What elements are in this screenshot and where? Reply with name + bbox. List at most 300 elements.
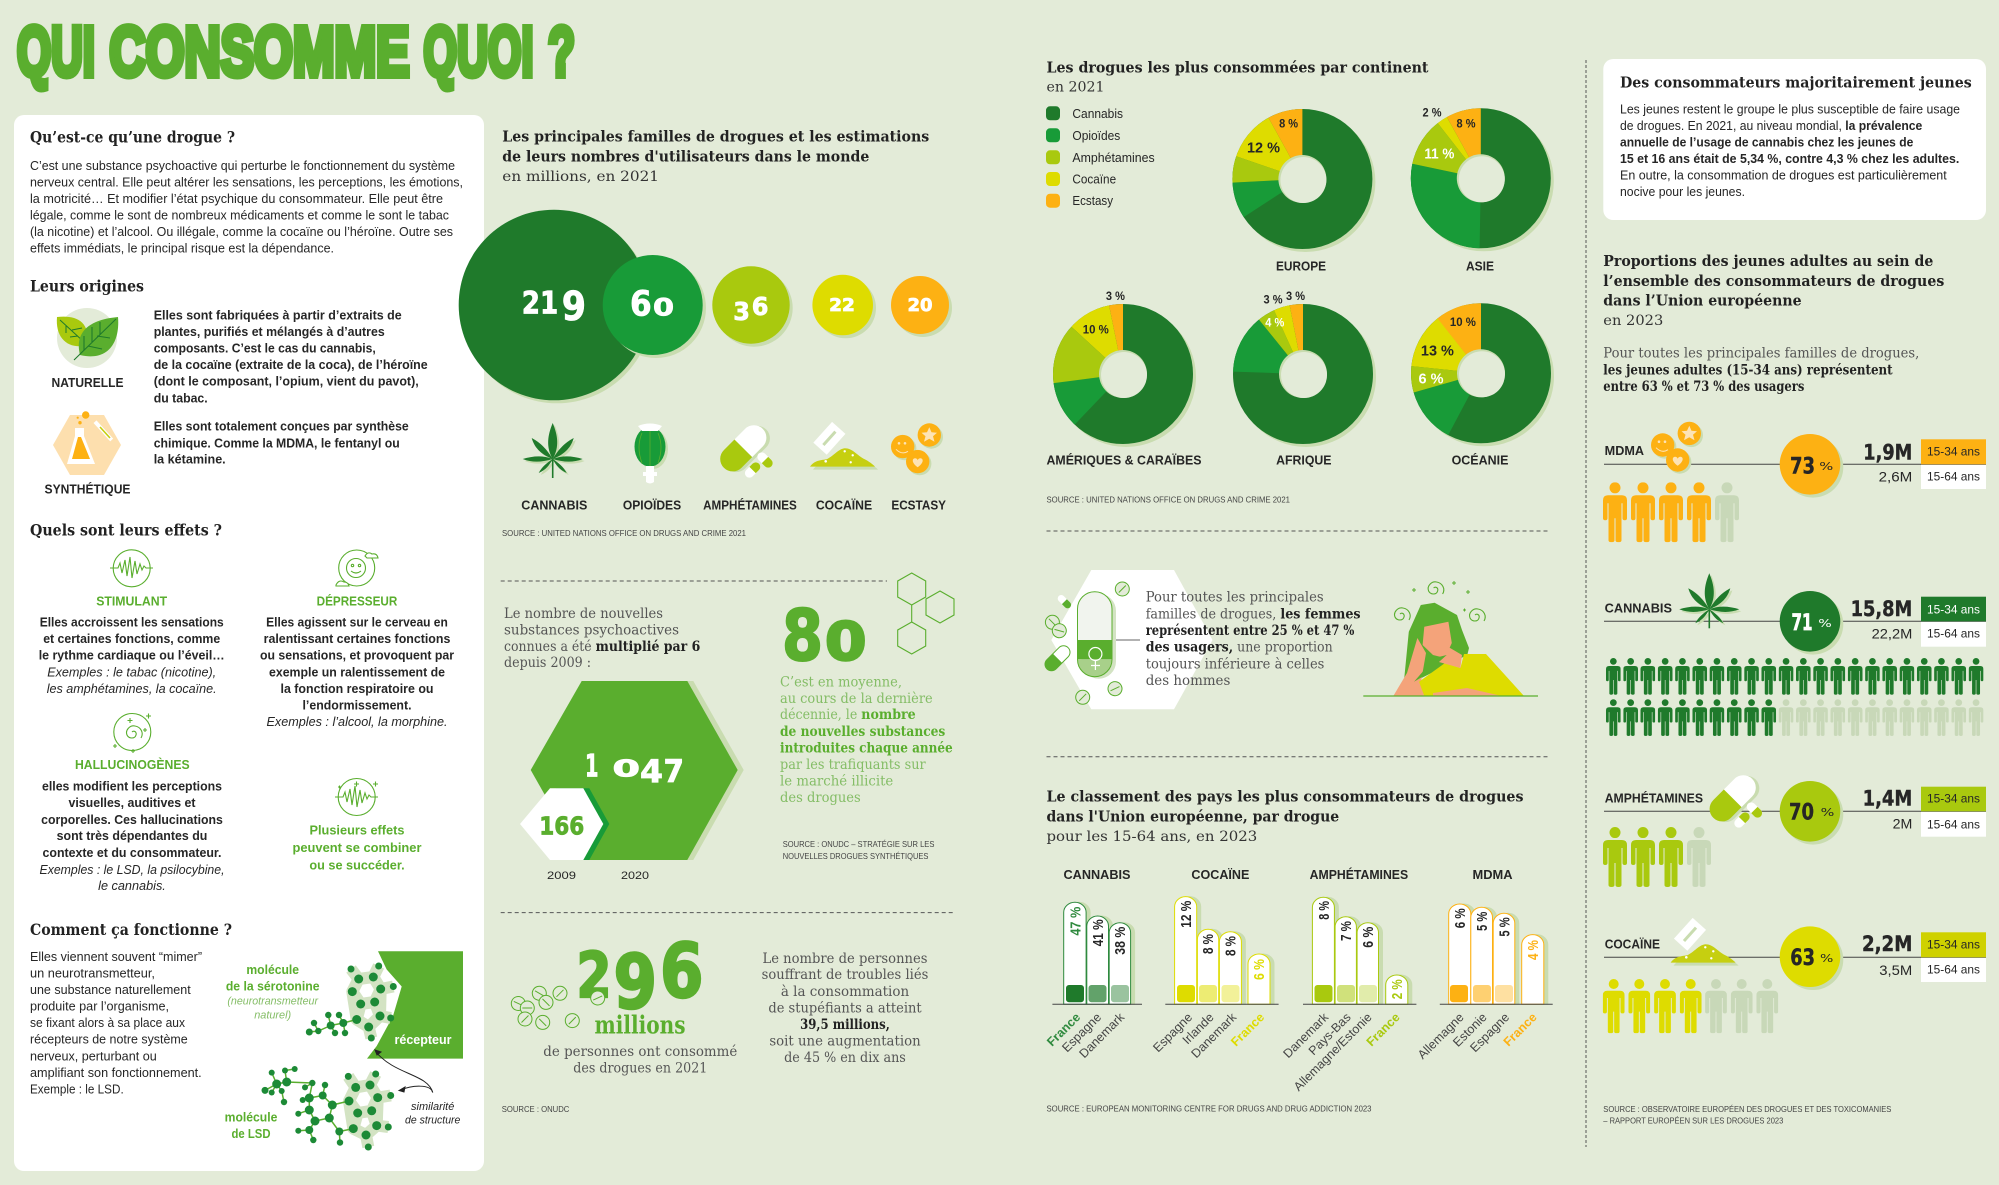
badge: 63 percent — [1780, 926, 1843, 990]
heading: young adult proportions — [1603, 252, 1944, 329]
badge: 63 percent: % — [1820, 952, 1833, 965]
text block: natural origin: (dont le composant, l’opium, vient du pavot), — [154, 374, 419, 389]
text block: drug disorders: de stupéfiants a atteint — [768, 1000, 922, 1016]
text block: how it works: une substance naturellement — [30, 982, 191, 997]
label: LSD molecule: de LSD — [232, 1126, 270, 1141]
big number: 296: 9 — [614, 938, 657, 1026]
heading: young adult proportions: dans l’Union européenne — [1603, 292, 1802, 310]
text block: women users: des hommes — [1146, 673, 1230, 689]
bar chart: amphetamines — [1280, 867, 1416, 1094]
bar chart: cocaine: Danemark — [1188, 1010, 1240, 1061]
bar chart: cocaine: COCAÏNE — [1191, 867, 1249, 882]
title: QUOI — [424, 12, 534, 90]
bubble chart: users — [459, 210, 952, 403]
row: MDMA — [1603, 422, 1986, 542]
badge: 71 percent — [1780, 591, 1843, 655]
label: Africa: AFRIQUE — [1276, 454, 1332, 468]
text block: young adult share: les jeunes adultes (15-34 ans) représentent — [1603, 362, 1893, 378]
text block: definition: C’est une substance psychoactive qui perturbe le fonctionnement du système — [30, 158, 455, 173]
legend: Ecstasy — [1072, 193, 1113, 208]
tags: age groups — [1921, 787, 1986, 837]
tags: age groups: 15-64 ans — [1927, 962, 1980, 976]
values: 1,4M of 2M — [1863, 787, 1912, 831]
source: European observatory — [1603, 1104, 1892, 1126]
text block: young users: Les jeunes restent le groupe le plus susceptible de faire usage — [1620, 101, 1960, 116]
donut: Oceania — [1414, 306, 1554, 468]
source: drug families: SOURCE : UNITED NATIONS OFFICE ON DRUGS AND CRIME 2021 — [502, 528, 746, 538]
heading: young adult proportions: en 2023 — [1603, 313, 1663, 329]
label: serotonin molecule — [226, 962, 320, 1021]
text block: drug disorders: 39,5 millions, — [800, 1017, 890, 1033]
bar chart: MDMA: 5 % — [1496, 917, 1514, 937]
donut: Africa: 3 % — [1286, 289, 1305, 303]
label: LSD molecule: molécule — [225, 1109, 277, 1124]
value: 166: 166 — [539, 811, 584, 840]
text block: young users: nocive pour les jeunes. — [1620, 184, 1745, 199]
text block: drug disorders: soit une augmentation — [769, 1034, 921, 1050]
donut: Africa — [1236, 289, 1376, 468]
icon: scattered tablets — [509, 985, 607, 1029]
text block: combined effects: Plusieurs effets — [310, 823, 404, 838]
label: structural similarity — [405, 1101, 460, 1126]
text block: hallucinogens: elles modifient les perceptions — [42, 779, 222, 794]
text block: young adult share: Pour toutes les principales familles de drogues, — [1603, 346, 1919, 362]
bar chart: MDMA: Estonie — [1450, 1010, 1490, 1050]
text block: yearly new substances: décennie, le nombre — [780, 707, 916, 723]
text block: how it works: récepteurs de notre système — [30, 1032, 188, 1047]
label: serotonin molecule: naturel) — [254, 1009, 292, 1021]
bar chart: cocaine: Irlande — [1180, 1010, 1217, 1047]
tags: age groups: 15-34 ans — [1927, 937, 1980, 951]
value: 1 047: 1 — [585, 748, 598, 784]
pictogram: people amphetamines — [1603, 827, 1711, 887]
text block: depressant — [260, 614, 454, 729]
value: 1 047 — [585, 748, 684, 790]
heading: drugs by continent: en 2021 — [1046, 80, 1104, 96]
text block: natural origin: de la cocaïne (extraite de la coca), de l’héroïne — [154, 357, 428, 372]
badge: 73 percent: % — [1819, 460, 1833, 473]
badge: 70 percent: % — [1821, 806, 1834, 819]
heading: young users: Des consommateurs majoritairement jeunes — [1620, 73, 1972, 91]
values: 2,2M of 3,5M: 3,5M — [1879, 962, 1912, 978]
molecule: serotonin — [306, 962, 397, 1042]
legend: Opioïdes — [1072, 128, 1121, 143]
bar chart: cocaine — [1150, 867, 1279, 1061]
text block: new substances: Le nombre de nouvelles — [504, 606, 663, 622]
bar chart: amphetamines: Allemagne/Estonie — [1291, 1010, 1375, 1094]
bubble: cannabis 219: 21 — [522, 285, 558, 321]
text block: definition: effets immédiats, le principal risque est la dépendance. — [30, 241, 334, 256]
text block: stimulant: Exemples : le tabac (nicotine), — [47, 664, 216, 680]
bubble: ecstasy 20 — [891, 276, 952, 337]
legend: Amphétamines — [1072, 150, 1155, 165]
text block: young users: 15 et 16 ans était de 5,34 %, contre 4,3 % chez les adultes. — [1620, 151, 1959, 166]
donut: Americas and Caribbean — [1046, 289, 1202, 468]
source: ONUDC: SOURCE : ONUDC — [502, 1104, 569, 1114]
text block: young users: annuelle de l’usage de cannabis chez les jeunes de — [1620, 135, 1913, 150]
text block: depressant: la fonction respiratoire ou — [280, 681, 434, 696]
bar chart: MDMA: 5 % — [1474, 912, 1491, 931]
text block: drug disorders: souffrant de troubles liés — [762, 967, 928, 983]
label: LSD molecule — [225, 1109, 277, 1141]
text block: stimulant — [39, 614, 225, 696]
text block: stimulant: le rythme cardiaque ou l’éveil… — [39, 648, 225, 662]
text block: combined effects: ou se succéder. — [309, 858, 405, 872]
text block: natural origin: Elles sont fabriquées à partir d’extraits de — [154, 307, 402, 322]
text block: how it works: se fixant alors à sa place aux — [30, 1015, 185, 1030]
arrows: structural similarity — [375, 1050, 433, 1092]
text block: drug disorders: de 45 % en dix ans — [784, 1050, 906, 1066]
bar chart: MDMA: France — [1501, 1010, 1540, 1049]
donut: Asia — [1414, 106, 1554, 273]
tags: age groups: 15-64 ans — [1927, 470, 1980, 484]
bar chart: cannabis: 41 % — [1090, 919, 1107, 946]
bar chart: amphetamines: 2 % — [1389, 979, 1406, 999]
text block: hallucinogens: Exemples : le LSD, la psilocybine, — [40, 862, 224, 877]
labels: drug families: ECSTASY — [891, 498, 947, 512]
bar chart: cannabis: France — [1044, 1010, 1083, 1049]
big number: 80: 8 — [782, 595, 823, 677]
text block: natural origin: plantes, purifiés et mélangés à d’autres — [154, 324, 385, 339]
donut: Europe: 8 % — [1279, 117, 1298, 131]
bar chart: cocaine: 8 % — [1200, 934, 1217, 954]
icon: ecstasy — [891, 423, 943, 475]
text block: yearly new substances: de nouvelles substances — [780, 724, 946, 740]
values: 15,8M of 22,2M: 15,8M — [1851, 597, 1912, 621]
values: 2,2M of 3,5M — [1862, 932, 1912, 978]
values: 1,4M of 2M: 1,4M — [1863, 787, 1912, 811]
values: 2,2M of 3,5M: 2,2M — [1862, 932, 1912, 956]
heading: what is a drug: Qu’est-ce qu’une drogue ? — [30, 128, 235, 147]
value: 1 047: 4 — [640, 754, 663, 790]
heading: drug families: de leurs nombres d'utilisateurs dans le monde — [502, 148, 869, 166]
text block: young adult share — [1603, 346, 1919, 395]
pictogram: people cocaine — [1603, 979, 1778, 1033]
heading: EU country ranking: Le classement des pays les plus consommateurs de drogues — [1046, 788, 1524, 806]
icon: synthetic flask — [53, 411, 121, 475]
label: Oceania: OCÉANIE — [1452, 453, 1508, 468]
text block: synthetic origin — [154, 419, 409, 467]
badge: 73 percent: 73 — [1790, 454, 1815, 479]
text block: stimulant: les amphétamines, la cocaïne. — [47, 681, 217, 696]
heading: drugs by continent — [1046, 58, 1429, 96]
source: new substances: SOURCE : ONUDC – STRATÉGIE SUR LES — [783, 839, 935, 849]
bubble: cannabis 219: 9 — [562, 284, 586, 330]
bubble: amphetamines 36 — [712, 266, 793, 347]
heading: young adult proportions: Proportions des jeunes adultes au sein de — [1603, 252, 1933, 270]
text block: natural origin — [154, 307, 428, 405]
row: cannabis — [1604, 573, 1986, 736]
text block: women users: Pour toutes les principales — [1146, 590, 1324, 606]
source: country ranking: SOURCE : EUROPEAN MONITORING CENTRE FOR DRUGS AND DRUG ADDICTION 2023 — [1046, 1104, 1372, 1114]
text block: how it works: produite par l’organisme, — [30, 999, 169, 1014]
text block: definition: légale, comme le sont de nombreux médicaments et comme le sont le tabac — [30, 208, 449, 223]
heading: drug families: Les principales familles de drogues et les estimations — [502, 128, 929, 146]
text block: new substances: depuis 2009 : — [504, 655, 591, 671]
bar chart: amphetamines: Pays-Bas — [1306, 1010, 1354, 1058]
bar chart: cannabis — [1044, 868, 1142, 1061]
bar chart: cannabis: 38 % — [1112, 927, 1129, 955]
bar chart: cocaine: 8 % — [1222, 936, 1240, 956]
text block: stimulant: Elles accroissent les sensations — [40, 614, 224, 629]
heading: drugs by continent: Les drogues les plus consommées par continent — [1046, 58, 1429, 76]
row: cocaine — [1603, 918, 1986, 1033]
bubble: cocaine 22: 22 — [829, 295, 855, 316]
bar chart: cannabis: Danemark — [1076, 1010, 1128, 1061]
text block: new substances — [504, 606, 700, 671]
pictogram: people MDMA — [1603, 482, 1739, 542]
illustration: dizzy woman — [1363, 581, 1538, 696]
bubble: cocaine 22 — [812, 275, 876, 338]
text block: young users — [1620, 101, 1960, 199]
badge: 70 percent: 70 — [1789, 800, 1814, 825]
text block: depressant: Elles agissent sur le cerveau en — [266, 614, 448, 629]
heading: EU country ranking: pour les 15-64 ans, en 2023 — [1046, 829, 1257, 845]
text block: new substances: connues a été multiplié par 6 — [504, 639, 700, 655]
text block: hallucinogens: contexte et du consommateur. — [42, 845, 222, 860]
text block: depressant: ou sensations, et provoquent par — [260, 648, 454, 662]
icon: amphetamine pill — [1704, 769, 1765, 830]
values: 1,9M of 2,6M: 1,9M — [1863, 440, 1912, 464]
text block: hallucinogens: sont très dépendantes du — [57, 828, 207, 843]
donut: Oceania: 13 % — [1421, 343, 1454, 360]
badge: 71 percent: 71 — [1792, 611, 1812, 636]
text block: yearly new substances: des drogues — [780, 790, 861, 806]
row: amphetamines — [1603, 769, 1986, 887]
bar chart: amphetamines: AMPHÉTAMINES — [1310, 867, 1408, 882]
bar chart: amphetamines: 7 % — [1338, 921, 1355, 941]
heading: EU country ranking: dans l'Union européenne, par drogue — [1046, 808, 1339, 826]
bar chart: cannabis: 47 % — [1068, 907, 1084, 936]
tags: age groups — [1921, 439, 1986, 489]
bubble: opioids 60 — [603, 255, 706, 358]
text block: natural origin: composants. C’est le cas du cannabis, — [154, 340, 376, 355]
text block: yearly new substances: le marché illicite — [780, 774, 893, 790]
bubble: opioids 60: 0 — [653, 294, 674, 322]
text block: yearly new substances: introduites chaque année — [780, 741, 953, 757]
values: 1,4M of 2M: 2M — [1893, 815, 1912, 831]
values: 1,9M of 2,6M — [1863, 440, 1912, 485]
bar chart: cocaine: 12 % — [1178, 901, 1195, 928]
source: new substances: NOUVELLES DROGUES SYNTHÉTIQUES — [783, 851, 929, 861]
text block: definition: (la nicotine) et l’alcool. Ou illégale, comme la cocaïne ou l’héroïne. Outre ses — [30, 224, 453, 239]
text block: women users — [1146, 590, 1361, 689]
donut: Asia: 8 % — [1456, 117, 1476, 131]
text block: young users: En outre, la consommation de drogues est particulièrement — [1620, 168, 1947, 183]
source: new substances — [783, 839, 935, 861]
text block: drug disorders — [762, 951, 928, 1066]
text block: yearly new substances: C’est en moyenne, — [780, 674, 902, 690]
text block: how it works: un neurotransmetteur, — [30, 966, 155, 981]
axis label: 2009: 2009 — [547, 870, 576, 882]
heading: drug families — [502, 128, 929, 185]
bar chart: MDMA: 4 % — [1525, 940, 1542, 960]
legend: Cannabis — [1072, 106, 1123, 121]
title: CONSOMME — [110, 12, 410, 90]
donut: Africa: 3 % — [1264, 292, 1283, 306]
legend — [1046, 106, 1155, 208]
values: 1,9M of 2,6M: 2,6M — [1879, 469, 1912, 485]
pictogram: people cannabis — [1606, 658, 1983, 736]
icon: natural leaves — [57, 308, 118, 368]
text block: yearly new substances: au cours de la dernière — [780, 691, 933, 707]
label: stimulant: STIMULANT — [96, 595, 168, 609]
labels: drug families: COCAÏNE — [816, 497, 872, 512]
text block: women users: des usagers, une proportion — [1146, 640, 1333, 656]
donut: Asia: 11 % — [1424, 146, 1454, 163]
label: amphetamines: AMPHÉTAMINES — [1605, 790, 1703, 805]
bar chart: cannabis: CANNABIS — [1064, 868, 1130, 882]
text block: women users: représentent entre 25 % et 47 % — [1146, 623, 1355, 639]
tags: age groups: 15-34 ans — [1927, 602, 1980, 616]
label: structural similarity: de structure — [405, 1114, 460, 1126]
bubble: ecstasy 20: 20 — [908, 295, 932, 316]
icon: stimulant — [110, 550, 153, 587]
bar chart: MDMA: MDMA — [1472, 868, 1512, 882]
big number: 296: 6 — [660, 927, 704, 1015]
label: cannabis: CANNABIS — [1605, 601, 1672, 615]
donut: Oceania: 6 % — [1418, 370, 1444, 387]
receptor shape — [367, 951, 463, 1059]
text block: 296 million users — [543, 1044, 737, 1076]
bar chart: amphetamines: Danemark — [1280, 1010, 1332, 1061]
badge: 73 percent — [1780, 434, 1843, 498]
labels: drug families: AMPHÉTAMINES — [703, 497, 797, 512]
heading: effects: Quels sont leurs effets ? — [30, 521, 222, 540]
donut: Asia: 2 % — [1422, 106, 1442, 120]
text block: how it works: amplifiant son fonctionnement. — [30, 1065, 202, 1080]
donut: Americas and Caribbean: 3 % — [1106, 289, 1125, 303]
bar chart: amphetamines: 6 % — [1360, 927, 1377, 948]
title: QUI — [17, 12, 95, 90]
text block: depressant: exemple un ralentissement de — [269, 664, 445, 680]
big number: 80: 0 — [825, 612, 866, 673]
badge: 71 percent: % — [1818, 617, 1832, 630]
text block: yearly new substances — [780, 674, 953, 806]
bar chart: amphetamines: 8 % — [1316, 901, 1333, 920]
tags: age groups: 15-64 ans — [1927, 817, 1980, 831]
heading: origins: Leurs origines — [30, 277, 144, 296]
text block: yearly new substances: par les trafiquants sur — [780, 757, 926, 773]
text block: young adult share: entre 63 % et 73 % des usagers — [1603, 379, 1805, 395]
bubble: cannabis 219 — [459, 210, 652, 403]
icon: cocaine — [810, 422, 878, 470]
label: Europe: EUROPE — [1276, 259, 1326, 273]
bubble: opioids 60: 6 — [630, 285, 652, 325]
text block: drug disorders: Le nombre de personnes — [762, 951, 928, 967]
values: 15,8M of 22,2M: 22,2M — [1872, 626, 1912, 642]
heading: how it works: Comment ça fonctionne ? — [30, 920, 232, 939]
text block: young users: de drogues. En 2021, au niveau mondial, la prévalence — [1620, 118, 1922, 133]
bar chart: MDMA — [1415, 868, 1553, 1062]
bar chart: cannabis: Espagne — [1059, 1010, 1104, 1055]
text block: hallucinogens — [40, 779, 224, 893]
label: Americas and Caribbean: AMÉRIQUES & CARAÏBES — [1046, 453, 1202, 468]
text block: women users: familles de drogues, les femmes — [1146, 606, 1361, 622]
heading: drug families: en millions, en 2021 — [502, 169, 659, 185]
title: ? — [548, 12, 575, 90]
value: 1 047: 7 — [664, 754, 684, 790]
icon: depressant — [336, 550, 378, 586]
text block: definition — [30, 158, 463, 256]
panel: young users — [1603, 59, 1986, 220]
text block: stimulant: et certaines fonctions, comme — [43, 631, 220, 646]
icon: cannabis leaf — [1679, 573, 1741, 628]
tags: age groups: 15-34 ans — [1927, 445, 1980, 459]
icon: cocaine heap — [1671, 918, 1739, 966]
badge: 70 percent — [1780, 781, 1843, 845]
bubble: amphetamines 36: 6 — [752, 292, 768, 321]
value: 1 047: 0 — [612, 756, 640, 782]
values: 15,8M of 22,2M — [1851, 597, 1912, 642]
source: continents: SOURCE : UNITED NATIONS OFFICE ON DRUGS AND CRIME 2021 — [1046, 495, 1290, 505]
text block: synthetic origin: chimique. Comme la MDMA, le fentanyl ou — [154, 435, 400, 450]
heading: EU country ranking — [1046, 788, 1524, 845]
source: European observatory: – RAPPORT EUROPÉEN SUR LES DROGUES 2023 — [1603, 1116, 1784, 1126]
bar chart: cocaine: Espagne — [1150, 1010, 1195, 1055]
text block: definition: nerveux central. Elle peut altérer les sensations, les perceptions, les émotions, — [30, 175, 463, 190]
icon: combined effects — [335, 778, 378, 816]
label: serotonin molecule: (neurotransmetteur — [227, 996, 319, 1008]
text block: how it works: Exemple : le LSD. — [30, 1081, 124, 1096]
badge: 63 percent: 63 — [1790, 946, 1815, 971]
tags: age groups — [1921, 932, 1986, 982]
label: cocaine: COCAÏNE — [1605, 936, 1660, 951]
text block: how it works: Elles viennent souvent “mimer” — [30, 949, 202, 964]
bar chart: cocaine: France — [1228, 1010, 1267, 1049]
icon: amphetamine pill — [715, 419, 775, 480]
donut: Americas and Caribbean: 10 % — [1083, 323, 1109, 337]
label: MDMA: MDMA — [1605, 444, 1644, 458]
text block: how it works: nerveux, perturbant ou — [30, 1049, 157, 1064]
molecule: LSD — [262, 1066, 394, 1150]
label: serotonin molecule: de la sérotonine — [226, 979, 320, 994]
text block: hallucinogens: corporelles. Ces hallucinations — [41, 812, 223, 827]
text block: definition: la motricité… Et modifier l’état psychique du consommateur. Elle peut être — [30, 191, 443, 206]
labels: drug families: OPIOÏDES — [623, 497, 681, 512]
labels: drug families: CANNABIS — [521, 498, 587, 512]
text block: hallucinogens: le cannabis. — [98, 878, 166, 893]
label: synthetic: SYNTHÉTIQUE — [44, 481, 130, 496]
donut: Oceania: 10 % — [1450, 315, 1476, 329]
big number: 80 — [782, 595, 866, 677]
legend: Cocaïne — [1072, 172, 1116, 186]
text block: combined effects: peuvent se combiner — [292, 840, 422, 855]
text block: synthetic origin: Elles sont totalement conçues par synthèse — [154, 419, 409, 434]
text block: 296 million users: des drogues en 2021 — [573, 1060, 707, 1076]
text block: depressant: l’endormissement. — [302, 698, 412, 712]
panel: what is a drug — [14, 115, 484, 1171]
icon: cannabis leaf — [523, 423, 585, 478]
label: serotonin molecule: molécule — [246, 962, 299, 977]
text block: synthetic origin: la kétamine. — [154, 452, 226, 467]
text block: depressant: ralentissant certaines fonctions — [264, 631, 450, 646]
bar chart: MDMA: Allemagne — [1415, 1010, 1467, 1062]
bubble: amphetamines 36: 3 — [733, 297, 750, 326]
big number: 296 — [576, 927, 704, 1026]
donut: Africa: 4 % — [1265, 316, 1285, 330]
label: Asia: ASIE — [1466, 259, 1494, 273]
label: depressant: DÉPRESSEUR — [317, 594, 397, 609]
icon: poppy — [634, 424, 668, 484]
icon: molecule outlines — [898, 573, 954, 654]
text block: hallucinogens: visuelles, auditives et — [68, 795, 196, 810]
label: receptor: récepteur — [394, 1032, 452, 1047]
heading: young adult proportions: l’ensemble des consommateurs de drogues — [1603, 272, 1944, 290]
text block: depressant: Exemples : l’alcool, la morphine. — [266, 714, 448, 729]
illustration: women capsule — [1042, 570, 1212, 709]
text block: new substances: substances psychoactives — [504, 622, 679, 638]
